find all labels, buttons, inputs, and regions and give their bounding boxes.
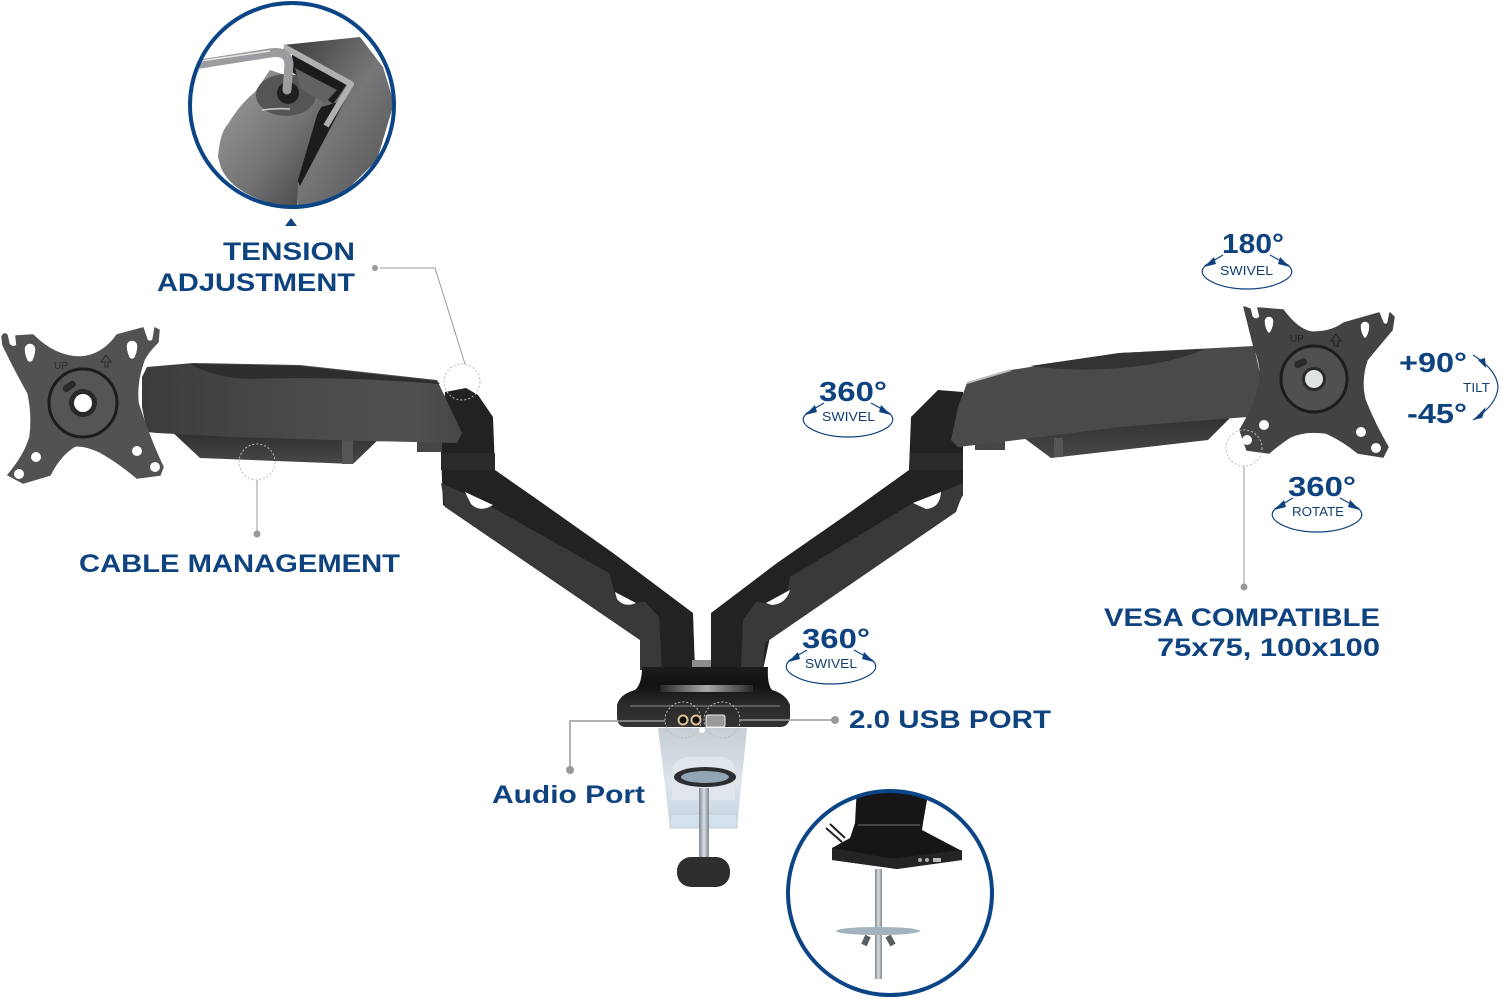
heading: usb port: 2.0 USB PORT [849, 706, 1051, 734]
rotation badge: 360 rotate [1272, 471, 1362, 532]
heading: tension adjustment: ADJUSTMENT [157, 269, 355, 297]
leader line: audio port [566, 702, 701, 774]
rotation badge: 360 swivel arm: 360° [819, 376, 887, 407]
rotation badge: tilt [1399, 347, 1498, 429]
heading: vesa compatible [1104, 604, 1380, 662]
heading: audio port: Audio Port [492, 781, 646, 809]
rotation badge: 360 rotate: ROTATE [1292, 504, 1344, 519]
desk base [617, 660, 790, 727]
left monitor arm upper section [142, 363, 462, 464]
rotation badge: 360 swivel base: SWIVEL [805, 656, 857, 671]
leader line: vesa compatible [1226, 430, 1262, 590]
leader line: usb port [704, 702, 839, 738]
leader line: tension adjustment [372, 265, 480, 400]
rotation badge: tilt: +90° [1399, 347, 1467, 378]
rotation badge: 360 swivel arm: SWIVEL [822, 409, 875, 424]
heading: vesa compatible: 75x75, 100x100 [1157, 634, 1380, 662]
rotation badge: 360 swivel base [786, 623, 876, 684]
rotation badge: tilt: TILT [1463, 380, 1490, 395]
pointer arrow up to inset [285, 218, 297, 226]
right lower arm [711, 390, 963, 670]
inset circle: tension adjustment close-up [190, 3, 394, 210]
leader line: cable management [239, 444, 275, 538]
clamp knob [677, 857, 730, 887]
rotation badge: 180 swivel: SWIVEL [1220, 263, 1273, 278]
audio and usb ports [678, 715, 725, 733]
left VESA plate [2, 328, 163, 483]
heading: vesa compatible: VESA COMPATIBLE [1104, 604, 1380, 632]
rotation badge: 360 rotate: 360° [1288, 471, 1356, 502]
heading: tension adjustment: TENSION [223, 238, 355, 266]
rotation badge: tilt: -45° [1407, 398, 1467, 429]
rotation badge: 360 swivel base: 360° [802, 623, 870, 654]
inset circle: grommet mounting close-up [788, 785, 992, 995]
rotation badge: 360 swivel arm [803, 376, 893, 437]
right VESA plate: UP [1290, 334, 1304, 345]
rotation badge: 180 swivel [1202, 228, 1292, 289]
C clamp [658, 728, 747, 860]
heading: tension adjustment [157, 238, 355, 297]
left lower arm [441, 388, 695, 670]
left VESA plate: UP [54, 361, 68, 372]
right VESA plate [1240, 307, 1394, 457]
rotation badge: 180 swivel: 180° [1222, 228, 1284, 259]
heading: cable management: CABLE MANAGEMENT [79, 550, 400, 578]
right monitor arm upper section [951, 346, 1262, 458]
